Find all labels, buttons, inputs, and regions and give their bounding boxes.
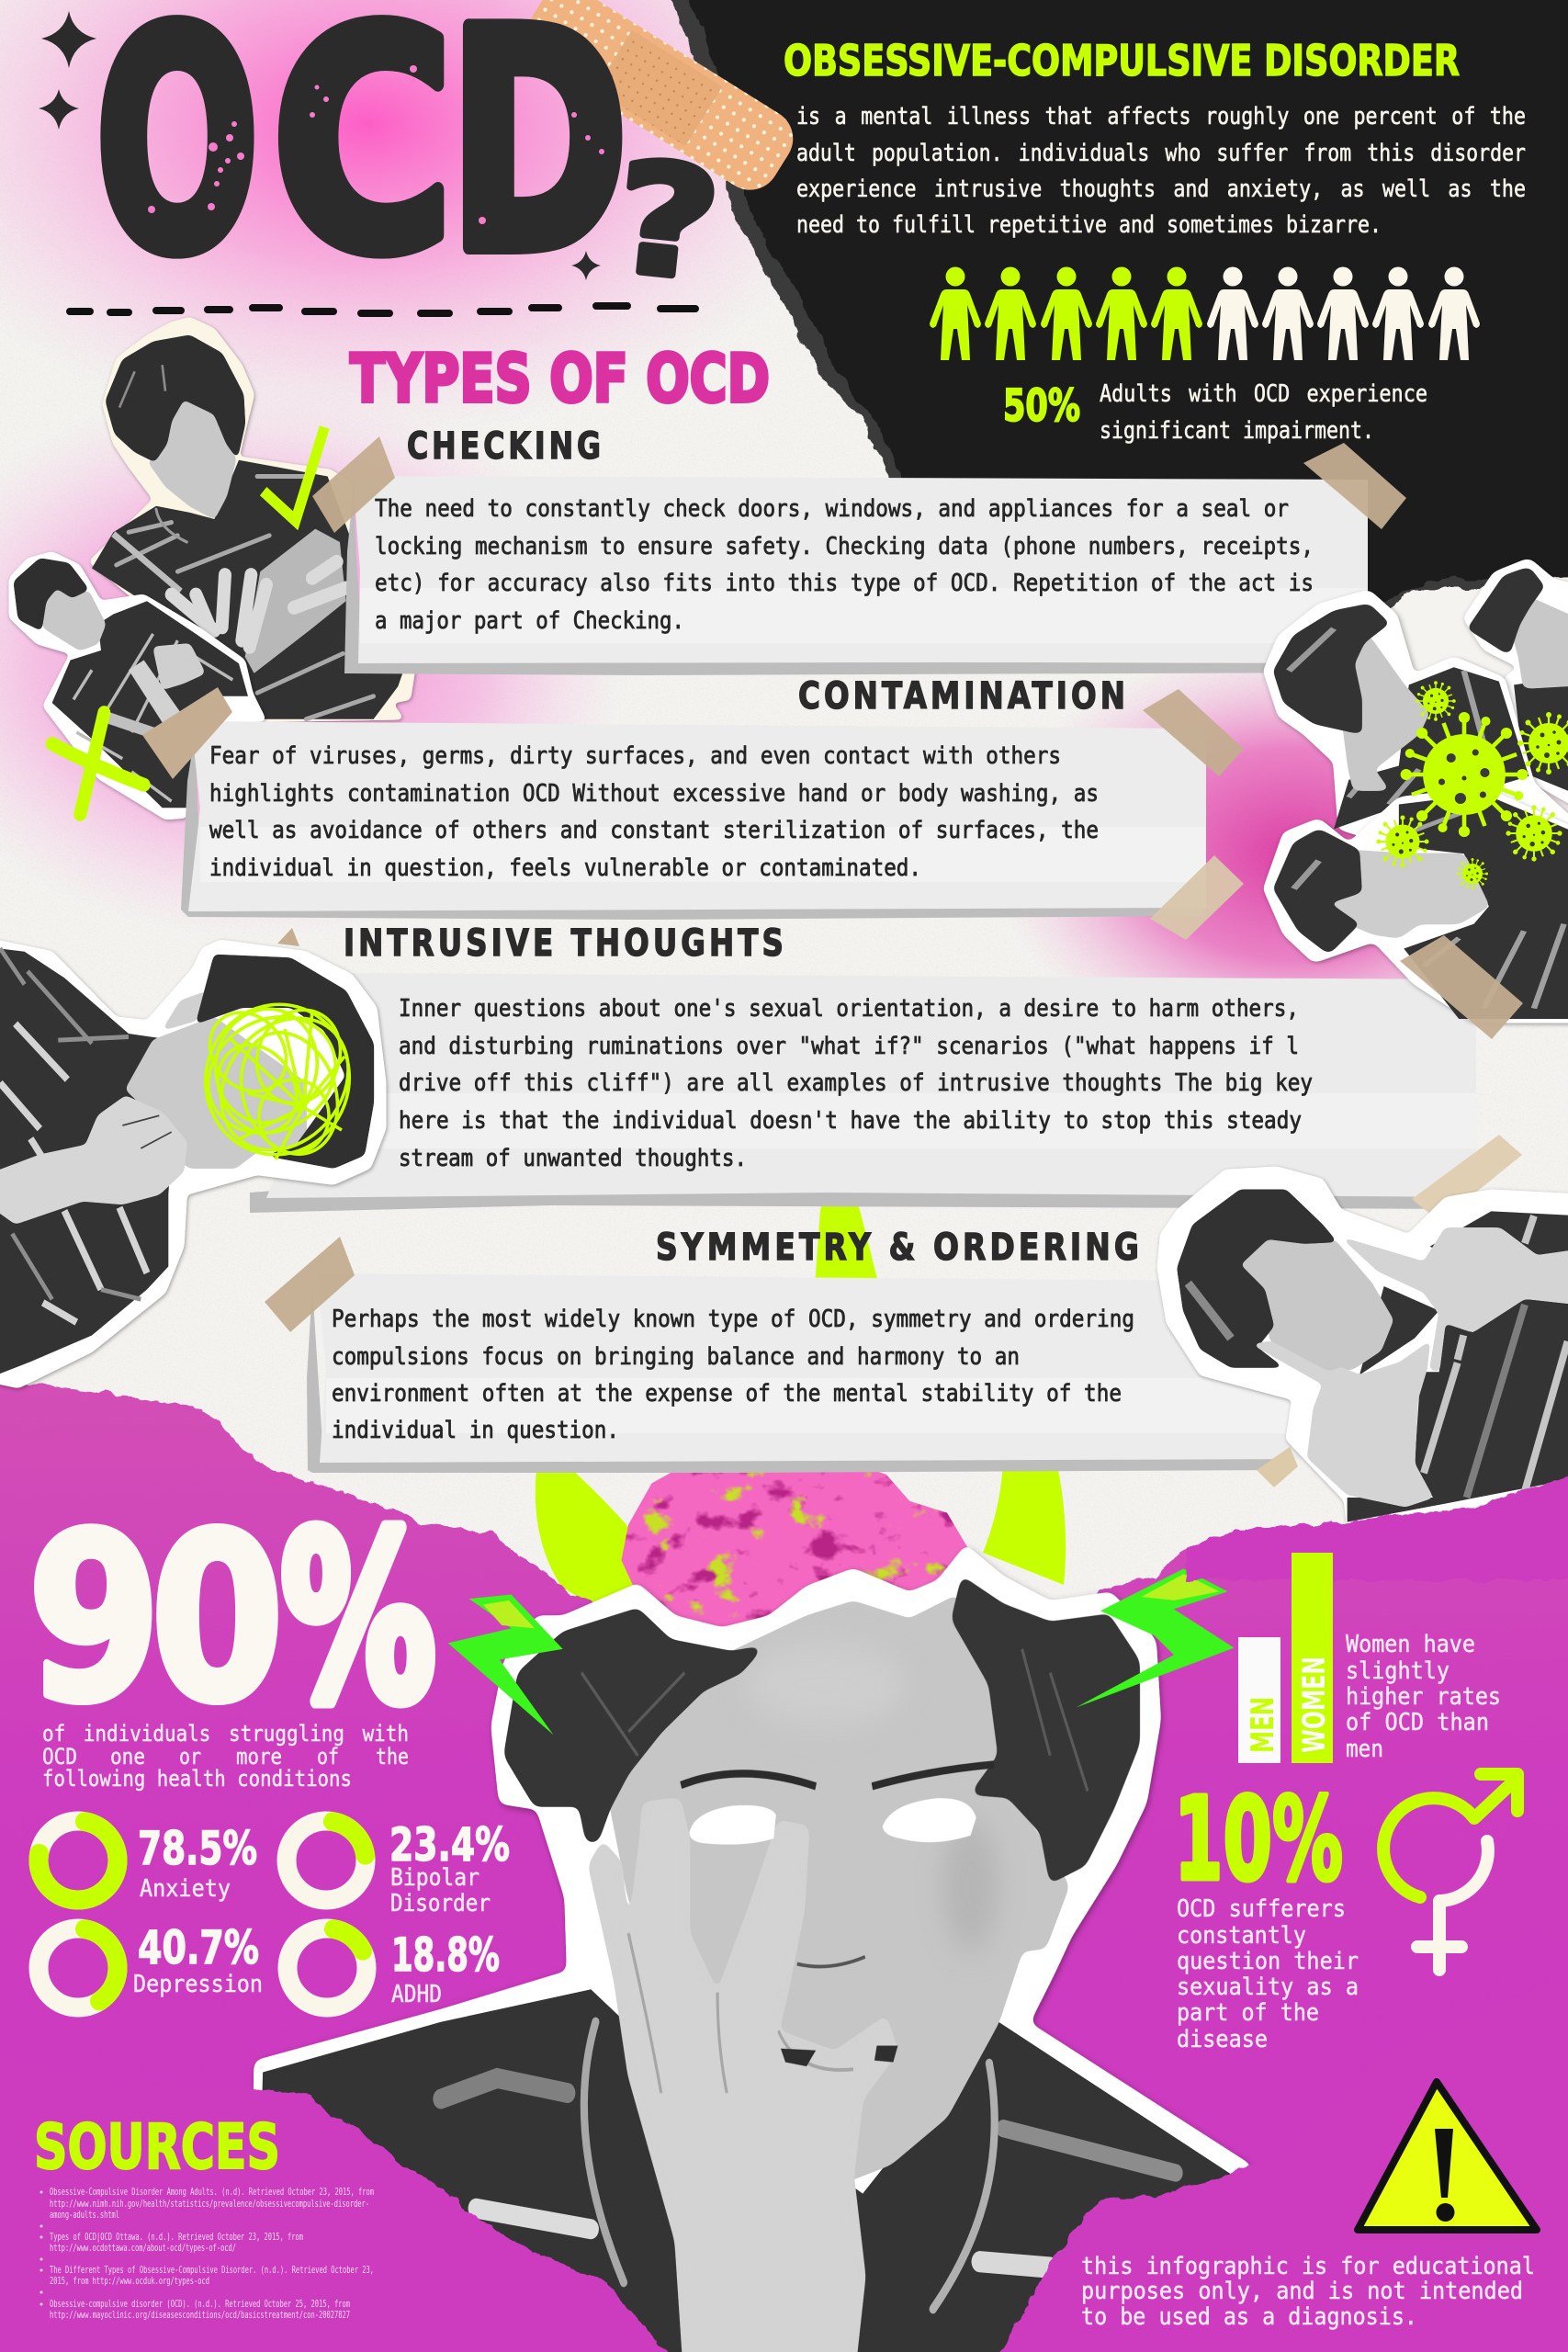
text: women rates: slightly	[1346, 1657, 1450, 1685]
chart: men vs women bars: WOMEN	[1296, 1657, 1333, 1753]
text: disclaimer	[1081, 2253, 1535, 2331]
text: 50% caption: Adults with OCD experience	[1100, 380, 1427, 408]
text: women rates: men	[1346, 1736, 1383, 1763]
sticker outline	[89, 317, 416, 722]
face	[126, 1017, 306, 1168]
text: 90% caption: OCD	[42, 1744, 77, 1770]
tape: contamination top right	[1143, 689, 1244, 776]
title: OCD?: ?	[606, 129, 728, 315]
text: 90% caption: of individuals struggling with	[42, 1721, 409, 1747]
face shading	[942, 1825, 999, 1947]
sticker outline	[1157, 1167, 1568, 1528]
hand	[0, 1096, 186, 1224]
panel: magenta lower paper	[0, 1379, 1568, 2352]
face	[147, 400, 236, 519]
chart: men vs women bars: MEN	[1245, 1697, 1281, 1753]
heading: symmetry and ordering: SYMMETRY & ORDERING	[656, 1227, 1143, 1269]
hair strands	[581, 1649, 1088, 1791]
hair	[14, 559, 89, 630]
text: sources list: http://www.nimh.nih.gov/health/statistics/prevalence/obsessivecompulsive-disorder-	[50, 2199, 369, 2210]
text: 10% caption: sexuality as a	[1177, 1973, 1359, 2001]
chart: donut anxiety 78.5%: Anxiety	[140, 1875, 231, 1903]
panel: note contamination	[142, 687, 1244, 940]
text: sources list: among-adults.shtml	[50, 2211, 119, 2221]
ear	[163, 991, 209, 1030]
icon: virus small 1	[1416, 681, 1456, 721]
text: sources list: Types of OCD|OCD Ottawa. (n.d.). Retrieved October 23, 2015, from	[50, 2233, 303, 2243]
illustration: small person	[9, 552, 266, 820]
panel: magenta lower right paper	[985, 1966, 1568, 2352]
text: symmetry body: individual in question.	[332, 1417, 619, 1444]
tape: contamination people	[1400, 935, 1523, 1039]
stat: 90%: 0	[151, 1485, 284, 1752]
icon: virus large	[1401, 712, 1528, 837]
icon: lime check	[264, 427, 324, 521]
chart: donut bipolar 23.4%: Disorder	[390, 1890, 491, 1917]
text: contamination body: well as avoidance of others and constant sterilization of surfaces, the	[209, 817, 1099, 844]
text: checking body	[375, 495, 1314, 635]
stat: 10%: 10%	[1174, 1773, 1343, 1906]
panel: black torn paper	[657, 0, 1568, 617]
sticker outline	[9, 552, 266, 820]
heading: intrusive thoughts: INTRUSIVE THOUGHTS	[344, 922, 787, 965]
title: OCD?	[96, 0, 728, 319]
text: 10% caption: OCD sufferers	[1177, 1895, 1346, 1923]
finger creases	[628, 1933, 853, 2093]
text: women rates	[1346, 1631, 1501, 1763]
text: intrusive thoughts body: and disturbing ruminations over "what if?" scenarios ("what happens if l	[399, 1033, 1299, 1060]
text: sources list: http://www.ocdottawa.com/about-ocd/types-of-ocd/	[50, 2244, 236, 2254]
text: sources list: The Different Types of Obsessive-Compulsive Disorder. (n.d.). Retrieved October 23,	[50, 2266, 374, 2276]
text: women rates: of OCD than	[1346, 1709, 1489, 1736]
illustration: person checking book	[89, 317, 416, 722]
nose and mouth marks	[797, 1957, 865, 1966]
text: women rates: Women have	[1346, 1631, 1475, 1658]
text: 90% caption: the	[376, 1744, 409, 1770]
face	[610, 1596, 1069, 2194]
icon: gender symbol	[1383, 1774, 1517, 1970]
chart: donut anxiety 78.5%	[32, 1815, 257, 1906]
pink glow: left	[0, 386, 625, 937]
hands	[1341, 1228, 1568, 1372]
fingers	[172, 561, 346, 647]
icon: bandage	[513, 0, 804, 201]
icon: lime scribble	[187, 989, 375, 1176]
panel: note checking	[312, 436, 1406, 675]
icon: lightning left	[448, 1595, 563, 1735]
note: intrusive thoughts back	[250, 1185, 1476, 1213]
lime burst behind brain	[536, 1194, 1066, 1608]
text: definition: need to fulfill repetitive and sometimes bizarre.	[796, 211, 1382, 239]
icon: virus small 3	[1376, 815, 1429, 868]
tape: symmetry right top	[1412, 1135, 1522, 1222]
brush dashed divider	[70, 306, 695, 313]
chart: donut ADHD 18.8%	[281, 1922, 500, 2014]
text: 90% caption: following health conditions	[42, 1766, 352, 1792]
pink glow: right	[992, 643, 1568, 1066]
icon: virus small 5	[1457, 858, 1488, 889]
chart: donut bipolar 23.4%: Bipolar	[390, 1864, 479, 1892]
book	[245, 529, 346, 673]
icon: brain	[621, 1460, 968, 1637]
book and hand	[129, 661, 181, 722]
text: contamination body: highlights contamination OCD Without excessive hand or body washing, as	[209, 780, 1099, 808]
stat: 90%	[28, 1485, 435, 1752]
illustration: person intrusive thoughts	[0, 938, 386, 1388]
text: symmetry body: Perhaps the most widely known type of OCD, symmetry and ordering	[332, 1306, 1134, 1333]
panel: note symmetry	[265, 1135, 1522, 1487]
chart: donut depression 40.7%	[32, 1921, 263, 2014]
shirt	[1348, 1211, 1568, 1522]
white eyes	[689, 1798, 976, 1845]
hair	[1178, 1190, 1337, 1367]
text: definition	[796, 103, 1526, 239]
hair	[504, 1609, 764, 1841]
text: 90% caption: more	[236, 1744, 282, 1770]
icon: lime cross	[52, 713, 144, 814]
text: intrusive thoughts body: stream of unwanted thoughts.	[399, 1145, 747, 1172]
icon: sparkle medium	[39, 89, 79, 130]
text: checking body: locking mechanism to ensure safety. Checking data (phone numbers, receipts,	[375, 533, 1314, 560]
text: women rates: higher rates	[1346, 1683, 1501, 1711]
tape: checking top left	[312, 436, 395, 533]
title distress specks	[148, 65, 604, 224]
text: checking body: The need to constantly check doors, windows, and appliances for a seal or	[375, 495, 1289, 523]
hair	[196, 955, 374, 1168]
icon: sparkle small	[571, 251, 601, 280]
heading: types of OCD: TYPES OF OCD	[350, 340, 770, 417]
tape: symmetry bottom	[1257, 1447, 1298, 1487]
text: symmetry body: compulsions focus on bringing balance and harmony to an	[332, 1343, 1020, 1371]
text: disclaimer: purposes only, and is not intended	[1081, 2278, 1523, 2305]
text: sources list	[40, 2188, 374, 2321]
text: intrusive thoughts body: here is that the individual doesn't have the ability to stop this steady	[399, 1107, 1302, 1135]
text: symmetry body: environment often at the expense of the mental stability of the	[332, 1380, 1122, 1408]
text: 50% caption: significant impairment.	[1100, 417, 1374, 445]
tape: contamination left	[142, 687, 232, 779]
icon row: ten people, five highlighted	[930, 266, 1480, 360]
stat: 90%: %	[281, 1485, 435, 1752]
chart: donut bipolar 23.4%: 23.4%	[389, 1818, 510, 1871]
text: 10% caption: constantly	[1177, 1922, 1306, 1950]
shirt	[0, 948, 172, 1374]
text: 10% caption	[1177, 1895, 1359, 2053]
hair	[106, 335, 245, 461]
stat: 50%: 50%	[1003, 380, 1080, 432]
text: checking body: etc) for accuracy also fits into this type of OCD. Repetition of the act is	[375, 570, 1314, 597]
illustration: person symmetry	[1157, 1167, 1568, 1528]
text: intrusive thoughts body: drive off this cliff") are all examples of intrusive thoughts The big key	[399, 1069, 1313, 1097]
tape: contamination bottom right	[1150, 855, 1244, 940]
icon: virus small 2	[1517, 712, 1568, 775]
shirt	[52, 601, 248, 808]
pink glow: title	[0, 0, 863, 436]
tape: intrusive top	[277, 928, 299, 946]
chart: donut ADHD 18.8%: ADHD	[391, 1981, 442, 2008]
icon: lightning right	[1076, 1568, 1235, 1708]
text: 50% caption	[1100, 380, 1427, 445]
chart: donut depression 40.7%: 40.7%	[138, 1921, 259, 1974]
illustration: contamination people	[1264, 559, 1568, 1023]
person top right	[1464, 559, 1568, 811]
text: 10% caption: part of the	[1177, 1999, 1319, 2027]
chart: donut bipolar 23.4%	[280, 1815, 510, 1917]
text: contamination body: individual in question, feels vulnerable or contaminated.	[209, 854, 921, 882]
text: 90% caption: or	[179, 1744, 201, 1770]
sticker outline	[254, 1545, 1252, 2352]
chart: donut depression 40.7%: Depression	[133, 1971, 263, 1998]
shirt	[254, 1989, 1252, 2352]
text: sources list: Obsessive-Compulsive Disorder Among Adults. (n.d). Retrieved October 23, 2015, from	[50, 2188, 374, 2198]
shirt	[92, 460, 407, 719]
chart: donut anxiety 78.5%: 78.5%	[138, 1822, 257, 1875]
text: contamination body: Fear of viruses, germs, dirty surfaces, and even contact with others	[209, 742, 1061, 770]
illustration: main person	[254, 1545, 1252, 2352]
face	[1231, 1234, 1393, 1372]
text: 90% caption: one	[110, 1744, 145, 1770]
text: sources list: 2015, from http://www.ocduk.org/types-ocd	[50, 2277, 209, 2287]
torn cover over symmetry person	[1187, 1470, 1568, 1580]
heading: sources: SOURCES	[34, 2111, 280, 2184]
tape: symmetry top left	[265, 1237, 355, 1332]
icon: warning triangle	[1358, 2082, 1537, 2230]
torn paper behind contamination stickers	[1378, 574, 1568, 735]
text: intrusive thoughts body	[399, 995, 1313, 1172]
note: intrusive thoughts	[266, 973, 1476, 1198]
text: 90% caption: of	[317, 1744, 339, 1770]
person lower	[1264, 786, 1568, 1023]
panel: magenta lower left sources paper	[0, 2054, 689, 2352]
text: contamination body	[209, 742, 1099, 882]
panel: intrusive thoughts note	[250, 928, 1476, 1213]
person upper	[1264, 590, 1568, 843]
eyebrows	[681, 1764, 994, 1786]
text: 10% caption: question their	[1177, 1948, 1359, 1975]
icon: virus small 4	[1506, 805, 1562, 862]
heading: checking: CHECKING	[407, 425, 604, 468]
chart: men vs women bars	[1238, 1553, 1333, 1763]
icon: sparkle large	[41, 11, 96, 68]
text: sources list: http://www.mayoclinic.org/diseasesconditions/ocd/basicstreatment/con-20027827	[50, 2311, 350, 2321]
tape: checking top right	[1303, 443, 1406, 529]
text: checking body: a major part of Checking.	[375, 607, 684, 635]
hand	[589, 1798, 897, 2352]
face	[43, 586, 106, 650]
text: intrusive thoughts body: Inner questions about one's sexual orientation, a desire to harm others,	[399, 995, 1299, 1023]
chart: donut ADHD 18.8%: 18.8%	[391, 1928, 500, 1982]
text: 90% caption	[42, 1721, 409, 1792]
text: symmetry body	[332, 1306, 1134, 1444]
sticker outline	[0, 938, 386, 1388]
stat: 90%: 9	[28, 1485, 161, 1752]
text: disclaimer: to be used as a diagnosis.	[1081, 2303, 1417, 2331]
text: sources list: Obsessive-compulsive disorder (OCD). (n.d.). Retrieved October 25, 2015, from	[50, 2300, 350, 2310]
text: 10% caption: disease	[1177, 2026, 1268, 2053]
heading: contamination: CONTAMINATION	[798, 675, 1129, 718]
